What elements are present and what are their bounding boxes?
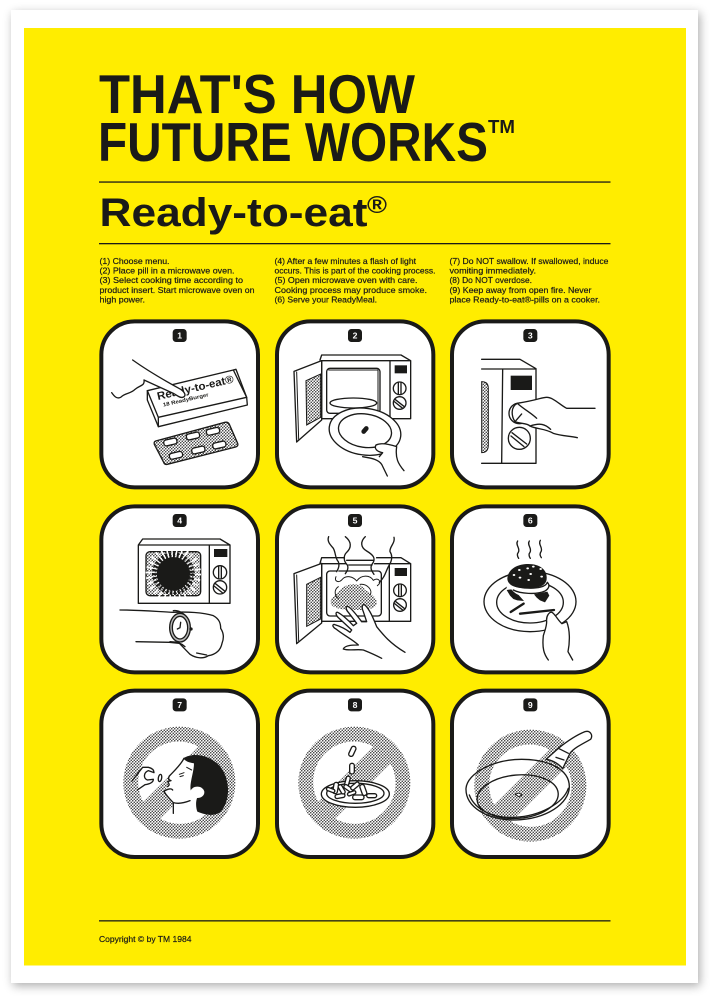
panel 9: keep away from open fire: [452, 691, 609, 857]
microwave: [320, 558, 411, 621]
panel 8: do not overdose: 8: [353, 700, 358, 710]
plate piled with pills: [321, 776, 389, 807]
prohibition sign: [298, 727, 410, 839]
subtitle: Ready-to-eat: [100, 191, 368, 235]
instructions column 2: (5) Open microwave oven with care.: [274, 275, 418, 285]
blister pack: [154, 422, 238, 464]
steam: [517, 540, 542, 558]
instructions column 3: vomiting immediately.: [450, 266, 536, 276]
title: [98, 63, 515, 173]
instructions column 3: (9) Keep away from open fire. Never: [450, 285, 592, 295]
plate with pill: [326, 404, 404, 460]
instructions column 3: (7) Do NOT swallow. If swallowed, induce: [450, 256, 609, 266]
instructions column 2: (6) Serve your ReadyMeal.: [274, 295, 377, 305]
prohibition sign: [123, 727, 235, 839]
panel 8: do not overdose: [277, 691, 433, 857]
microwave: [320, 355, 411, 419]
pointing hand: [112, 360, 185, 398]
panel 3: select cooking time: 3: [528, 331, 533, 341]
title: THAT'S HOW: [99, 63, 415, 125]
panel 7: do not swallow: [101, 691, 258, 857]
hand: [543, 612, 573, 660]
face and hair: [164, 755, 228, 815]
panel 5: open microwave with care: [277, 506, 433, 672]
panel 7: do not swallow: 7: [177, 700, 182, 710]
fries: [511, 604, 554, 614]
prohibition sign: [474, 730, 586, 842]
instructions column 1: [100, 256, 255, 305]
open door: [294, 563, 322, 644]
burger: [506, 564, 549, 602]
instructions column 2: (4) After a few minutes a flash of light: [274, 256, 417, 266]
panel 1: choose menu: 1: [177, 331, 182, 341]
instructions column 3: (8) Do NOT overdose.: [450, 275, 532, 285]
instructions column 3: place Ready-to-eat®-pills on a cooker.: [450, 295, 600, 305]
panel 2: place pill in microwave: [277, 321, 433, 487]
microwave close-up: [482, 359, 536, 463]
rule: [99, 920, 610, 922]
reaching hand: [333, 605, 405, 658]
instructions column 2: occurs. This is part of the cooking process.: [274, 266, 436, 276]
panel 4: flash of light: [101, 506, 258, 672]
panel 6: serve ReadyMeal: [452, 506, 609, 672]
hand holding pill: [132, 767, 154, 790]
frying pan: [466, 731, 592, 822]
instructions column 2: [274, 256, 436, 305]
title: TM: [488, 116, 515, 137]
pill: [158, 774, 162, 782]
falling pills: [348, 746, 357, 774]
arm with watch: [120, 610, 223, 658]
pill box: Ready-to-eat®: [156, 374, 235, 403]
smoke: [328, 537, 394, 610]
instructions column 3: [450, 256, 609, 305]
open door: [294, 361, 322, 442]
panel 9: keep away from open fire: 9: [528, 700, 533, 710]
pill box: 18 ReadyBurger: [162, 392, 209, 409]
microwave flashing: [138, 539, 230, 603]
pill box: [147, 369, 247, 427]
panel 2: place pill in microwave: 2: [353, 331, 358, 341]
panel 1: choose menu: [101, 321, 258, 487]
plate: [484, 572, 576, 632]
panel 5: open microwave with care: 5: [353, 516, 358, 526]
instructions column 1: product insert. Start microwave oven on: [100, 285, 255, 295]
instructions column 1: high power.: [100, 295, 145, 305]
title: FUTURE WORKS: [98, 111, 488, 173]
hand: [363, 444, 404, 476]
panel 3: select cooking time: [452, 321, 609, 487]
hand on dial: [512, 397, 595, 438]
instructions column 1: (3) Select cooking time according to: [100, 275, 243, 285]
instructions column 1: (2) Place pill in a microwave oven.: [100, 266, 234, 276]
rule: [99, 243, 610, 244]
copyright: Copyright © by TM 1984: [99, 934, 192, 944]
instructions column 2: Cooking process may produce smoke.: [274, 285, 427, 295]
panel 6: serve ReadyMeal: 6: [528, 516, 533, 526]
panel 4: flash of light: 4: [177, 516, 182, 526]
rule: [99, 181, 610, 183]
subtitle: ®: [367, 192, 387, 219]
instructions column 1: (1) Choose menu.: [100, 256, 170, 266]
